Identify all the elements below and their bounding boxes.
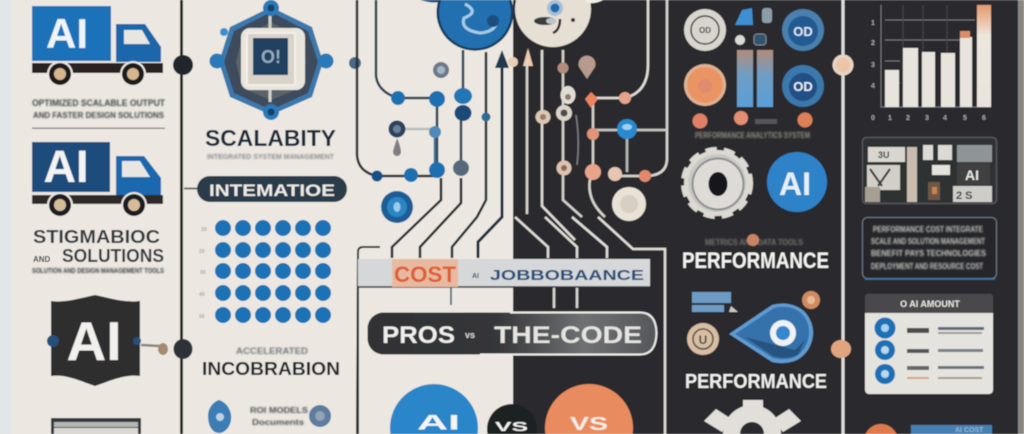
text block: dot matrix row labels: 10 — [201, 227, 207, 233]
node: second column connector — [349, 57, 361, 69]
text block: performance label: JOBBOBAANCE — [490, 267, 644, 284]
left frame line — [356, 246, 380, 434]
text block: dot matrix row labels: 40 — [199, 292, 205, 298]
text panel: PERFORMANCE COST INTEGRATE — [873, 225, 984, 234]
icon: AI truck two — [32, 141, 163, 218]
icon: blue dial lower: OD — [793, 79, 813, 94]
icon: bottom panel — [51, 418, 141, 434]
icon: octagon chip — [210, 0, 334, 120]
icon: AI truck one: AI — [46, 10, 88, 57]
icon row: incorporation footer: ROI MODELS — [250, 406, 309, 415]
icon row two — [875, 340, 983, 360]
icon: AI badge: AI — [66, 310, 122, 372]
icon: AI truck one — [32, 6, 163, 87]
cost bar: AI — [472, 273, 479, 280]
bar chart: 6 — [982, 115, 986, 122]
image panel: collage: AI — [965, 167, 979, 183]
icon: orange dial — [684, 64, 726, 106]
chart: dot matrix — [215, 220, 331, 323]
circuit: right nodes — [536, 56, 651, 221]
bar chart: 3 — [925, 115, 929, 122]
heading: streamlined solutions: SOLUTION AND DESIGN MANAGEMENT TOOLS — [32, 268, 164, 275]
bar chart — [871, 5, 991, 122]
icon row: incorporation footer — [208, 400, 331, 433]
image panel: collage: 2 S — [956, 190, 973, 202]
text block: dot matrix row labels — [199, 227, 207, 320]
text block: truck one caption — [32, 98, 165, 120]
text block: dial caption: PERFORMANCE ANALYTICS SYSTEM — [695, 131, 810, 140]
text block: dot matrix row labels: 30 — [200, 270, 206, 276]
icon: blue dial top — [782, 9, 824, 51]
circuit: arrowheads at centre — [495, 48, 533, 68]
heading: performance two: PERFORMANCE — [685, 371, 827, 393]
bar chart: 4 — [943, 115, 947, 122]
circuit: left nodes — [372, 62, 490, 223]
bar chart: 1 — [888, 115, 892, 122]
icon: peach marker — [802, 291, 820, 309]
icon: beige ring: U — [699, 333, 707, 347]
image panel: collage: 3U — [878, 150, 890, 160]
panel: chart column — [862, 5, 996, 434]
icon: AI truck two: AI — [44, 141, 88, 192]
icon: beige brain hemisphere — [515, 0, 603, 47]
icon: AI circle: AI — [779, 166, 811, 202]
comparison: orange circle: VS — [570, 414, 608, 434]
connector: pill link — [184, 188, 197, 190]
text panel: DEPLOYMENT AND RESOURCE COST — [871, 262, 983, 271]
heading: streamlined solutions: SOLUTIONS — [62, 246, 164, 266]
pill: integration: INTEMATIOE — [209, 181, 335, 200]
heading: performance one: PERFORMANCE — [682, 248, 829, 273]
text panel: BENEFIT PAYS TECHNOLOGIES — [871, 249, 987, 258]
image panel: collage — [862, 138, 996, 204]
node: top left connector — [173, 55, 193, 75]
panel: scalability column — [184, 0, 361, 433]
column divider lines — [182, 0, 843, 434]
icon: blue teardrop — [729, 303, 813, 363]
panel: performance column — [682, 8, 829, 434]
pill: integration — [197, 176, 347, 202]
text panel: SCALE AND SOLUTION MANAGEMENT — [871, 237, 985, 246]
text block: performance caption: METRICS AND DATA TOOLS — [705, 238, 804, 247]
icon: salmon markers — [692, 111, 812, 128]
node: lower left connector — [174, 339, 192, 359]
footer: orange circle — [866, 424, 896, 434]
text block: incorporation caption: ACCELERATED — [236, 346, 309, 356]
icon: blue brain hemisphere — [420, 0, 514, 51]
comparison: AI circle — [390, 384, 478, 434]
cost bar — [358, 259, 650, 305]
icon row: incorporation footer: Documents — [252, 418, 305, 427]
icon: AI circle — [767, 152, 827, 212]
chart: twin bars — [737, 50, 773, 107]
icon: beige dial: OD — [699, 26, 711, 35]
pill: pros the code — [368, 312, 656, 354]
icon: blue dial lower — [782, 65, 824, 107]
heading: streamlined solutions: AND — [33, 255, 51, 264]
pill: pros the code: PROS — [382, 322, 455, 349]
text block: truck one caption: OPTIMIZED SCALABLE OUTPUT — [32, 98, 165, 108]
text block: truck one caption: AND FASTER DESIGN SOLUTIONS — [33, 111, 165, 120]
bar chart: 1 — [871, 20, 875, 27]
icon: white gear — [704, 400, 801, 434]
comparison: VS badge — [487, 404, 537, 434]
card: summary — [865, 294, 993, 394]
panel: left column — [32, 6, 193, 434]
text block: dot matrix row labels: 20 — [199, 249, 205, 255]
footer: blue banner: AI COST — [955, 427, 984, 434]
circuit: right light lines — [515, 0, 667, 434]
icon: small peach marker — [747, 234, 759, 246]
footer: blue banner — [911, 425, 992, 434]
node: performance upper — [832, 54, 854, 76]
bar chart: 2 — [871, 40, 875, 47]
icon: octagon chip: O! — [261, 47, 281, 67]
comparison: orange circle — [545, 384, 633, 434]
card: summary: O AI AMOUNT — [900, 299, 960, 309]
text panel — [862, 218, 996, 279]
icon: beige dial — [684, 9, 726, 51]
text block: dot matrix row labels: 50 — [199, 314, 205, 320]
pill: pros the code: THE-CODE — [494, 322, 642, 349]
icon: stacked blue rects — [692, 292, 738, 312]
node: performance lower — [831, 340, 851, 358]
icon: blue dial top: OD — [793, 24, 813, 39]
bar chart: 5 — [963, 115, 967, 122]
icon row three — [875, 364, 984, 384]
bar chart: 2 — [906, 115, 910, 122]
circuit: left dark lines — [357, 0, 502, 258]
heading: scalability: SCALABITY — [205, 125, 336, 151]
icon: beige gear — [684, 150, 750, 216]
bar chart: 4 — [871, 83, 875, 90]
comparison: VS badge: VS — [495, 419, 529, 434]
heading: incorporation: INCOBRABION — [202, 359, 340, 379]
text block: scalability caption: INTEGRATED SYSTEM MANAGEMENT — [207, 154, 335, 161]
bar chart: 3 — [871, 62, 875, 69]
comparison: AI circle: AI — [417, 412, 460, 434]
heading: streamlined solutions — [32, 227, 164, 275]
heading: streamlined solutions: STIGMABIOC — [33, 227, 160, 247]
bar chart: 0 — [871, 115, 875, 122]
heading: cost: COST — [394, 262, 457, 287]
icon: small top glyphs — [735, 8, 772, 45]
icon: beige ring — [687, 323, 719, 355]
pill: pros the code: vs — [465, 330, 475, 340]
icon row one — [874, 318, 984, 338]
icon: AI badge — [47, 295, 168, 386]
